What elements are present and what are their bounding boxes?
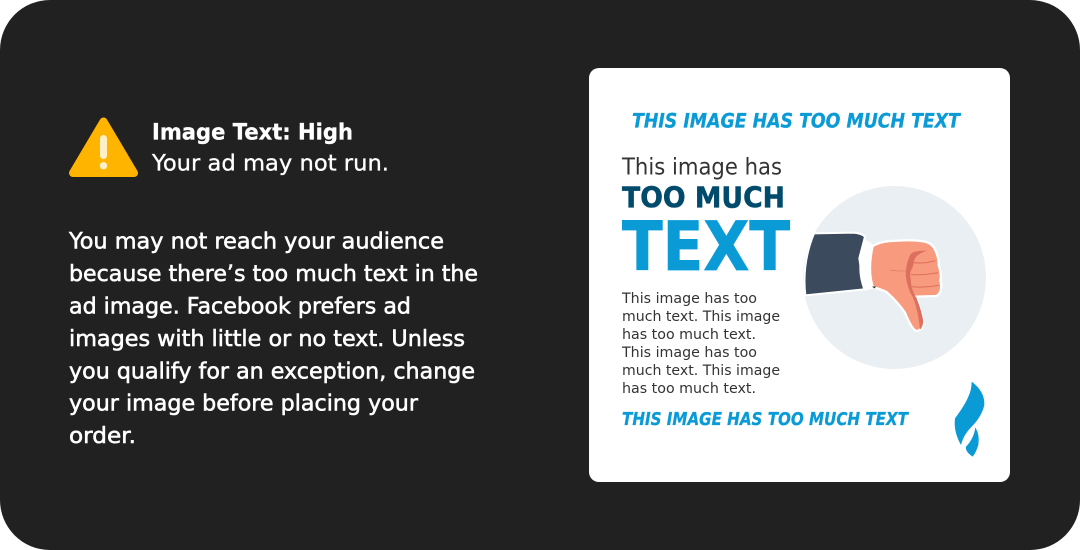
body text block: your image before placing your <box>69 392 419 416</box>
body text block: order. <box>69 424 136 449</box>
warning heading <box>151 120 389 176</box>
warning heading: Your ad may not run. <box>151 150 389 176</box>
body text block: images with little or no text. Unless <box>69 327 465 352</box>
panel: example ad image <box>589 68 1010 482</box>
icon: thumbs down in circle <box>803 186 986 369</box>
big text heading: TEXT <box>622 208 791 287</box>
icon: warning triangle <box>73 122 134 173</box>
small paragraph: has too much text. <box>622 381 756 397</box>
body text block: you qualify for an exception, change <box>69 360 475 384</box>
body text block: because there’s too much text in the <box>69 262 478 287</box>
icon: blue flame logo <box>955 382 984 457</box>
warning heading: Image Text: High <box>152 120 353 146</box>
too much heading: TOO MUCH <box>622 182 785 214</box>
small paragraph <box>621 291 780 397</box>
small paragraph: much text. This image <box>622 363 780 379</box>
body text block <box>68 230 478 449</box>
body text block: You may not reach your audience <box>68 230 444 254</box>
body text block: ad image. Facebook prefers ad <box>69 294 411 320</box>
bottom italic headline: THIS IMAGE HAS TOO MUCH TEXT <box>622 410 910 430</box>
small paragraph: has too much text. <box>622 327 756 343</box>
ad intro line: This image has <box>621 154 782 180</box>
small paragraph: This image has too <box>621 291 757 307</box>
small paragraph: much text. This image <box>622 309 780 325</box>
small paragraph: This image has too <box>621 345 757 361</box>
top italic headline: THIS IMAGE HAS TOO MUCH TEXT <box>632 110 962 132</box>
